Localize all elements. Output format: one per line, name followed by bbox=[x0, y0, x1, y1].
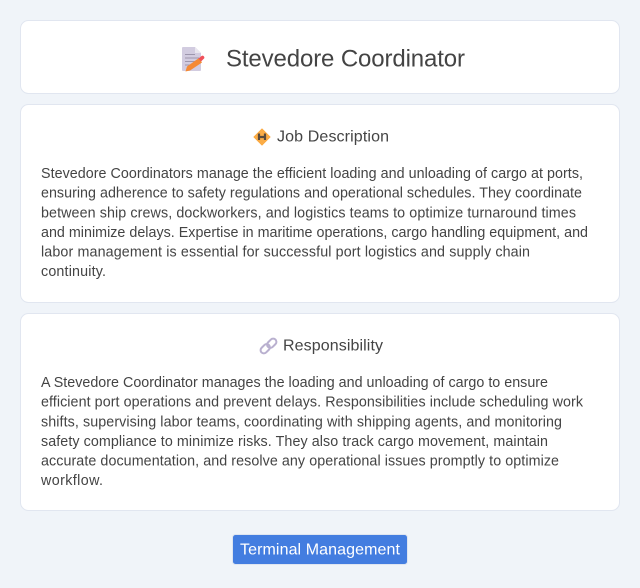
text block: responsibility: shifts, supervising labor teams, coordinating with shipping agents, and monitoring bbox=[41, 414, 562, 430]
icon: chain link bbox=[259, 337, 278, 355]
text block: job description bbox=[41, 166, 588, 280]
text block: job description: ensuring adherence to safety regulations and operational schedules. They coordinate bbox=[41, 186, 582, 202]
text block: job description: and minimize delays. Expertise in maritime operations, cargo handling equipment, and bbox=[41, 225, 588, 241]
heading: responsibility: Responsibility bbox=[283, 338, 383, 354]
text block: responsibility: accurate documentation, and resolve any operational issues promptly to optimize bbox=[41, 454, 559, 470]
title: Stevedore Coordinator bbox=[226, 46, 465, 72]
button: terminal management: Terminal Management bbox=[240, 542, 401, 558]
icon: road sign diamond bbox=[254, 128, 270, 146]
text block: responsibility: A Stevedore Coordinator manages the loading and unloading of cargo to ensure bbox=[41, 375, 548, 391]
panel: responsibility bbox=[20, 314, 620, 510]
button: terminal management bbox=[232, 534, 408, 564]
text block: responsibility: workflow. bbox=[40, 473, 103, 489]
text block: job description: between ship crews, dockworkers, and logistics teams to optimize turnaround times bbox=[41, 206, 576, 222]
text block: job description: continuity. bbox=[41, 264, 106, 280]
text block: responsibility: efficient port operations and prevent delays. Responsibilities include scheduling work bbox=[41, 394, 584, 410]
panel: job description bbox=[20, 104, 620, 302]
heading: job description: Job Description bbox=[277, 128, 389, 146]
panel: title card bbox=[20, 20, 620, 94]
text block: job description: labor management is essential for successful port logistics and supply chain bbox=[41, 244, 530, 260]
text block: responsibility: safety compliance to minimize risks. They also track cargo movement, maintain bbox=[41, 434, 548, 450]
text block: responsibility bbox=[40, 375, 584, 489]
icon: document with pencil bbox=[182, 47, 204, 72]
text block: job description: Stevedore Coordinators manage the efficient loading and unloading of cargo at ports, bbox=[41, 166, 583, 182]
